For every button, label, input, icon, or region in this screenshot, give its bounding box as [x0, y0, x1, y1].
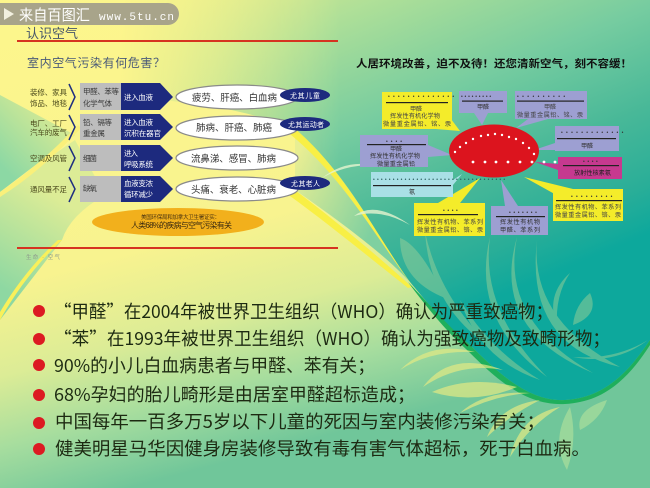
row 4	[30, 176, 330, 202]
row 3: 空调及风管	[30, 153, 68, 163]
row 4: 头痛、衰老、心脏病	[191, 184, 276, 196]
row 4: 尤其老人	[291, 179, 320, 188]
row 3	[30, 145, 298, 171]
row 4: 循环减少	[124, 189, 154, 199]
box: formaldehyde purple 1	[459, 91, 507, 113]
box: purple bottom: 甲醛、苯系列	[500, 226, 540, 234]
box: radon pink: ••••	[583, 159, 600, 165]
box: formaldehyde purple 3: 甲醛	[581, 142, 594, 150]
footer label: 生命 · 空气	[26, 253, 60, 261]
box: formaldehyde purple 2: ••••••••••	[517, 94, 569, 100]
hub ellipse	[449, 124, 539, 178]
bullet 6: 健美明星马华因健身房装修导致有毒有害气体超标，死于白血病。	[55, 435, 590, 461]
bullet 4: 68%孕妇的胎儿畸形是由居室甲醛超标造成；	[54, 381, 415, 407]
row 1: 装修、家具	[30, 87, 68, 97]
row 2: 重金属	[83, 128, 105, 138]
row 2: 铅、镉等	[83, 117, 112, 127]
bullet 2: “苯”在1993年被世界卫生组织（WHO）确认为强致癌物及致畸形物；	[54, 325, 610, 351]
row 3: 进入	[124, 149, 138, 158]
panel: bullet list	[33, 298, 610, 461]
bullet 5: 中国每年一百多万5岁以下儿童的死因与室内装修污染有关；	[55, 408, 545, 434]
box: left purple	[360, 135, 428, 168]
box: formaldehyde purple 3: •••••••••••••	[561, 130, 627, 136]
panel: red hub diagram	[360, 91, 627, 236]
row 3: 呼吸系统	[124, 159, 154, 169]
callout: orange ellipse: 人类68%的疾病与空气污染有关	[131, 220, 232, 230]
bullet 3: 90%的小儿白血病患者与甲醛、苯有关；	[54, 352, 375, 378]
row 2: 汽车的废气	[30, 127, 68, 137]
row 2	[30, 114, 330, 140]
box: formaldehyde yellow: 甲醛	[410, 105, 423, 113]
box: yellow bottom left: 微量重金属铅、铬、汞	[417, 226, 483, 234]
box: yellow bottom left: ••••	[443, 208, 460, 214]
box: left purple: 微量重金属铅	[377, 160, 415, 168]
box: formaldehyde yellow: 微量重金属铅、铭、汞	[383, 120, 451, 128]
box: left purple: 挥发性有机化学物	[370, 152, 420, 160]
panel: pollution hazard rows	[30, 83, 330, 202]
box: formaldehyde purple 2	[515, 91, 587, 119]
row 1: 饰品、地毯	[30, 98, 68, 108]
box: formaldehyde yellow	[382, 92, 457, 129]
hub dots	[454, 133, 556, 163]
row 1: 疲劳、肝癌、白血病	[192, 92, 277, 104]
row 2: 电厂、工厂	[30, 118, 68, 128]
row 1: 进入血液	[124, 92, 154, 102]
row 1: 甲醛、苯等	[83, 86, 120, 96]
row 4: 缺氧	[83, 183, 98, 193]
row 2: 尤其运动者	[288, 120, 324, 129]
bullet 1: “甲醛”在2004年被世界卫生组织（WHO）确认为严重致癌物；	[54, 298, 553, 324]
box: radon pink: 放射性核素氡	[574, 169, 611, 177]
box: purple bottom: 挥发性有机物	[500, 218, 540, 226]
row 1	[30, 83, 330, 110]
box: radon light blue: 氡	[409, 188, 415, 196]
box: yellow right: 挥发性有机物、苯系列	[555, 203, 621, 211]
bottom red rule	[17, 247, 338, 249]
box: formaldehyde yellow: 挥发性有机化学物	[390, 112, 440, 120]
box: left purple: ••••	[386, 139, 405, 145]
box: formaldehyde purple 3	[555, 126, 627, 151]
watermark pill: 来自百图汇	[19, 7, 90, 24]
box: radon pink	[558, 157, 622, 179]
row 4: 通风量不足	[30, 184, 68, 194]
row 2: 沉积在器官	[124, 128, 161, 138]
row 2: 进入血液	[124, 117, 154, 127]
box: yellow right: 微量重金属铅、铬、汞	[555, 211, 621, 219]
lower leaves	[400, 349, 560, 457]
box: formaldehyde purple 2: 甲醛	[544, 103, 557, 111]
row 2: 肺病、肝癌、肺癌	[196, 122, 272, 134]
watermark pill	[0, 3, 179, 25]
row 3: 细菌	[83, 153, 98, 163]
top red rule	[17, 40, 338, 42]
box: purple bottom: •••••••	[509, 210, 539, 216]
heading: 认识空气: 认识空气	[26, 26, 78, 41]
box: purple bottom	[491, 206, 548, 235]
watermark pill: www.5tu.cn	[99, 12, 174, 24]
right heading: 人居环境改善，迫不及待！还您清新空气，刻不容缓！	[356, 57, 632, 70]
box: yellow bottom left	[414, 203, 485, 236]
box: formaldehyde yellow: ••••••••••••••	[388, 94, 457, 100]
box: yellow bottom left: 挥发性有机物、苯系列	[417, 218, 483, 226]
callout: orange ellipse: 美国环保局和加拿大卫生署证实：	[141, 213, 220, 221]
feathers on swoosh	[400, 232, 648, 380]
callout: orange ellipse	[92, 208, 264, 236]
box: radon light blue	[371, 172, 453, 197]
box: formaldehyde purple 1: •••••••••	[461, 94, 493, 100]
box: formaldehyde purple 2: 微量重金属铅、铭、汞	[517, 111, 583, 119]
row of dots: radon: ••••••••••••••••••••••••••••••••••	[373, 177, 507, 183]
box: yellow right: •••••••••	[571, 194, 616, 200]
callout tails	[428, 113, 573, 206]
row 3: 流鼻涕、感冒、肺病	[191, 153, 276, 165]
box: yellow right	[553, 189, 623, 221]
box: left purple: 甲醛	[390, 145, 403, 153]
row 4: 血液变浓	[124, 178, 154, 188]
row 1: 化学气体	[83, 98, 112, 108]
box: formaldehyde purple 1: 甲醛	[477, 103, 490, 111]
subheading: 室内空气污染有何危害: 室内空气污染有何危害？	[27, 55, 165, 70]
row 1: 尤其儿童	[290, 91, 320, 100]
